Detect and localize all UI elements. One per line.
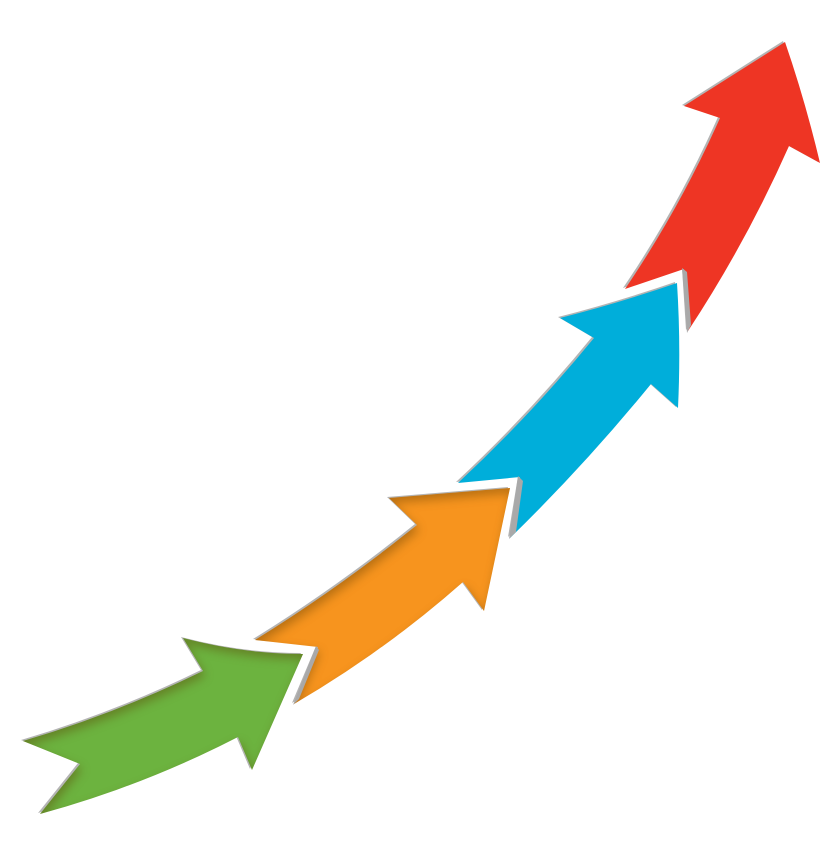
arrow: orange (stage 2): [253, 487, 510, 705]
green arrow bevel edge: [21, 637, 301, 813]
arrow: blue (stage 3): [456, 282, 679, 539]
red arrow notch bevel: [682, 268, 691, 333]
arrow: red (stage 4): [623, 41, 820, 333]
blue arrow body: [458, 283, 679, 538]
orange arrow notch bevel: [293, 646, 319, 705]
red arrow body: [625, 42, 820, 331]
green arrow body: [23, 638, 303, 814]
orange arrow bevel edge: [253, 487, 508, 703]
orange arrow body: [255, 488, 510, 704]
arrow: green (stage 1): [21, 637, 303, 814]
red arrow bevel edge: [623, 41, 818, 330]
blue arrow notch bevel: [509, 476, 523, 539]
blue arrow bevel edge: [456, 282, 677, 537]
